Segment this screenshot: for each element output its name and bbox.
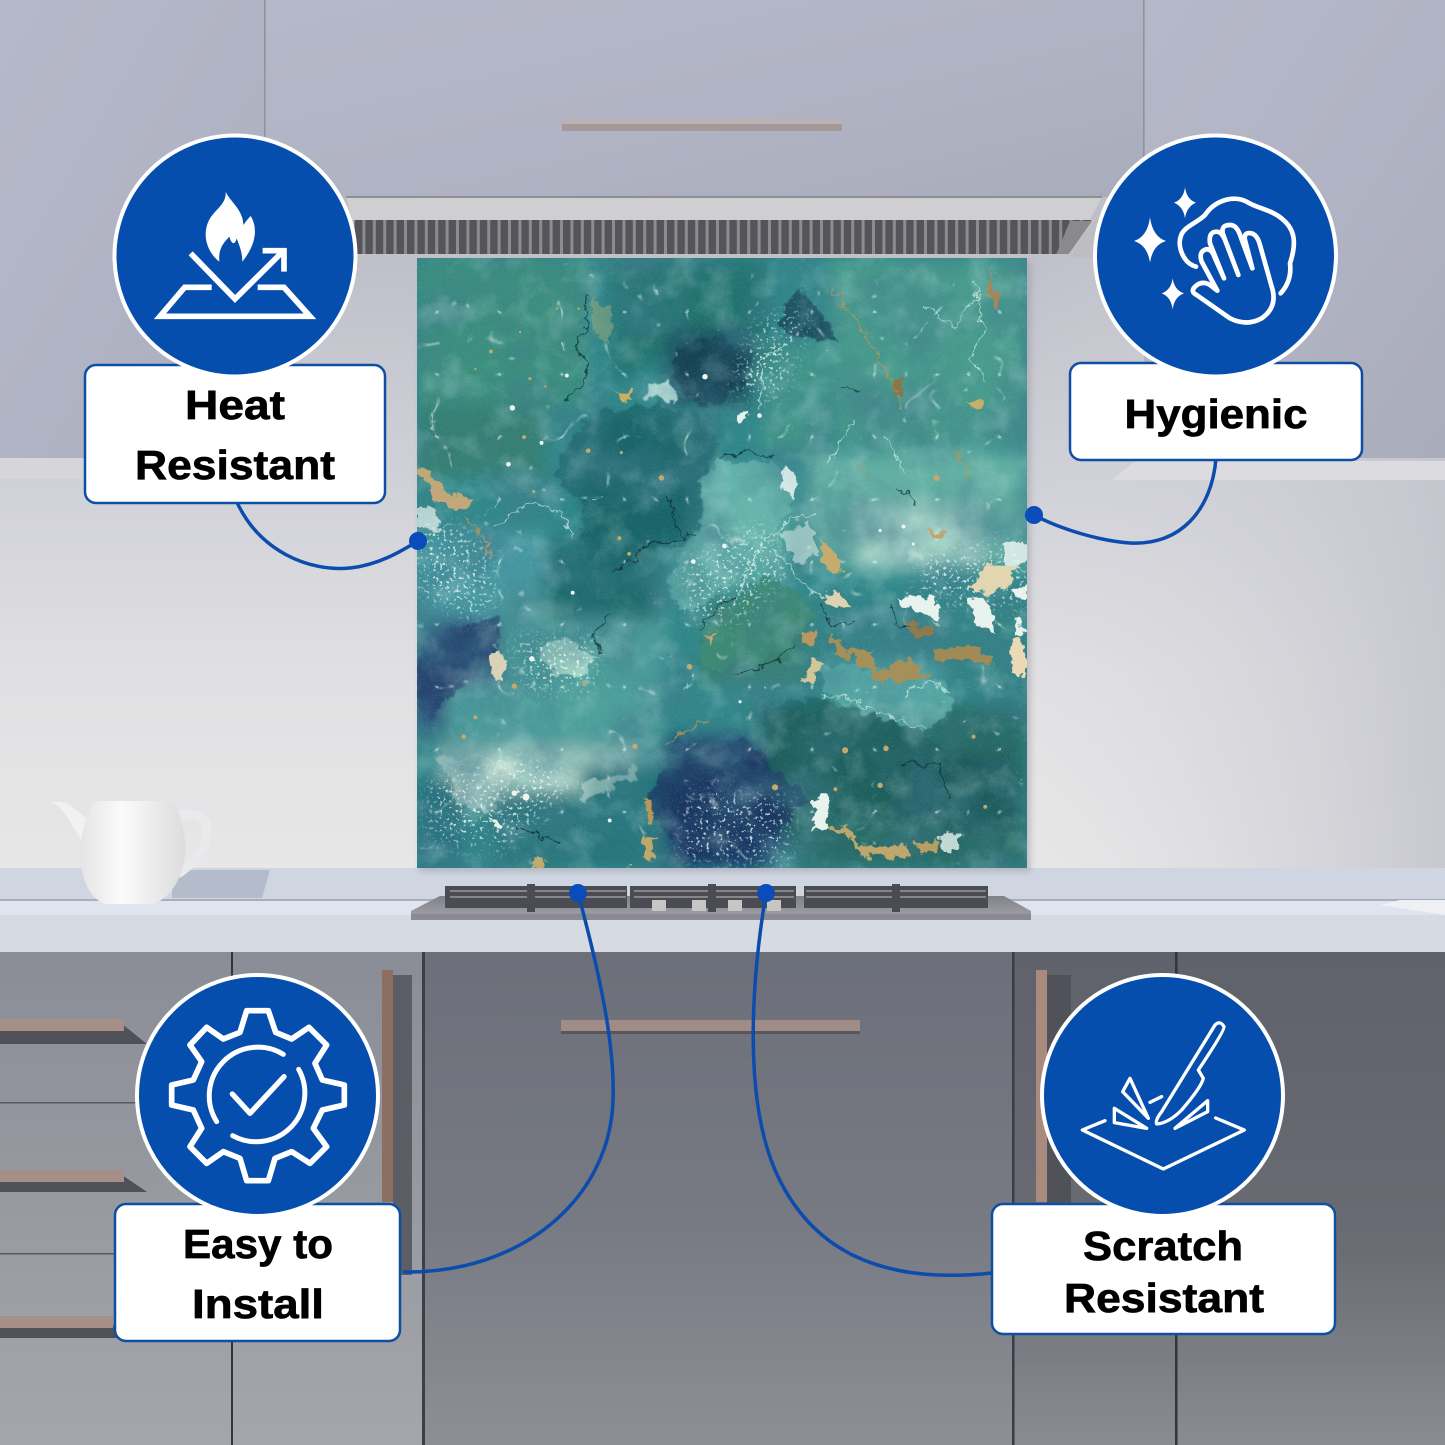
- callout: Hygienic: [1070, 136, 1362, 460]
- label text: Easy to: [183, 1221, 333, 1267]
- callout: Scratch Resistant: [992, 975, 1335, 1334]
- connector dot: Scratch Resistant: [757, 884, 775, 902]
- connector: Easy to Install: [403, 893, 613, 1272]
- connector dot: Hygienic: [1025, 506, 1043, 524]
- gold and white flecks: [461, 307, 987, 809]
- callout: Easy to Install: [115, 975, 400, 1341]
- white splashes: [417, 412, 1027, 850]
- veins and flecks: [417, 266, 1027, 868]
- white veins: [495, 281, 985, 729]
- stone texture: [417, 258, 1027, 868]
- range hood: [346, 196, 1105, 258]
- label box: [1070, 363, 1362, 460]
- gold patches: [417, 277, 1001, 868]
- label text: Hygienic: [1124, 391, 1308, 437]
- label text: Heat: [185, 382, 285, 428]
- callout: Easy to Install: Install: [192, 1281, 324, 1327]
- connector: Hygienic: [1034, 458, 1216, 543]
- callout: Heat Resistant: Resistant: [135, 442, 335, 488]
- callout: Heat Resistant: [85, 136, 385, 503]
- base cabinets: [0, 952, 1445, 1445]
- marble glass splashback panel: [417, 258, 1027, 868]
- callout: Scratch Resistant: Resistant: [1064, 1275, 1264, 1321]
- panel shadow: [419, 262, 1031, 872]
- icon circle: wiping hand with sparkles: [1095, 136, 1336, 376]
- drawer handles: [0, 970, 1071, 1338]
- label text: Scratch: [1083, 1223, 1243, 1269]
- gold veins: [468, 266, 997, 745]
- white jug: [50, 801, 211, 904]
- connector dot: Easy to Install: [569, 884, 587, 902]
- cabinet handle: top: [562, 119, 842, 131]
- icon circle: gear with check: [137, 975, 378, 1216]
- icon circle: flame on surface: [114, 136, 356, 376]
- label box: [115, 1204, 400, 1341]
- label box: [992, 1204, 1335, 1334]
- countertop: [0, 868, 1445, 952]
- wall: [0, 190, 1445, 880]
- upper cabinets: [0, 0, 1445, 480]
- label box: [85, 365, 385, 503]
- gas hob: [411, 884, 1031, 920]
- low frequency colour map: [417, 258, 1027, 868]
- stone facets: [417, 285, 1012, 857]
- icon circle: knife scratching surface: [1042, 975, 1283, 1216]
- dark cracks: [518, 297, 950, 842]
- connector: Heat Resistant: [235, 498, 418, 568]
- connector: Scratch Resistant: [753, 893, 992, 1275]
- connector dot: Heat Resistant: [409, 532, 427, 550]
